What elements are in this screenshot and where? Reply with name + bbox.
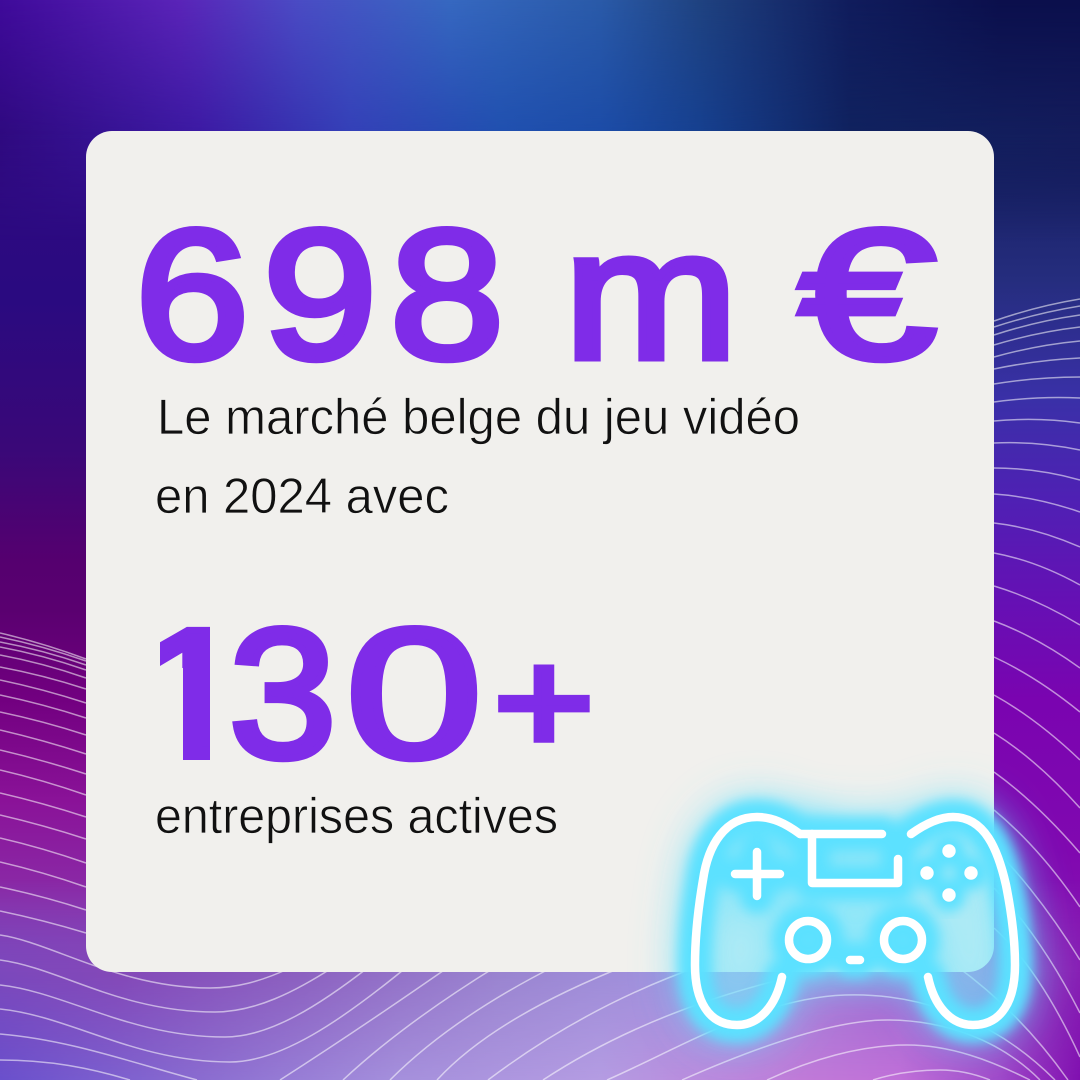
- stat: 130+: [160, 625, 590, 762]
- text: active companies: entreprises actives: [155, 788, 558, 844]
- stat: 698 m €: [135, 192, 936, 398]
- stat: 130+: +: [494, 620, 594, 783]
- stat: 698 m €: 8: [390, 193, 504, 398]
- stat: 698 m €: €: [799, 192, 936, 398]
- stat: 698 m €: 9: [263, 193, 377, 398]
- text: market description: Le marché belge du jeu vidéo: [157, 389, 800, 445]
- background wave lines: [0, 299, 1080, 1080]
- stat: 130+: 3: [229, 590, 336, 796]
- stat: 698 m €: 6: [135, 193, 249, 398]
- panel: white card: [86, 131, 994, 972]
- stat: 130+: 0: [346, 590, 482, 796]
- stat: 130+: 1: [131, 591, 254, 797]
- text: market description: en 2024 avec: [155, 468, 449, 524]
- stat: 698 m €: m: [564, 192, 738, 397]
- text: market description: [155, 389, 800, 524]
- icon: neon game controller: [695, 817, 1015, 1025]
